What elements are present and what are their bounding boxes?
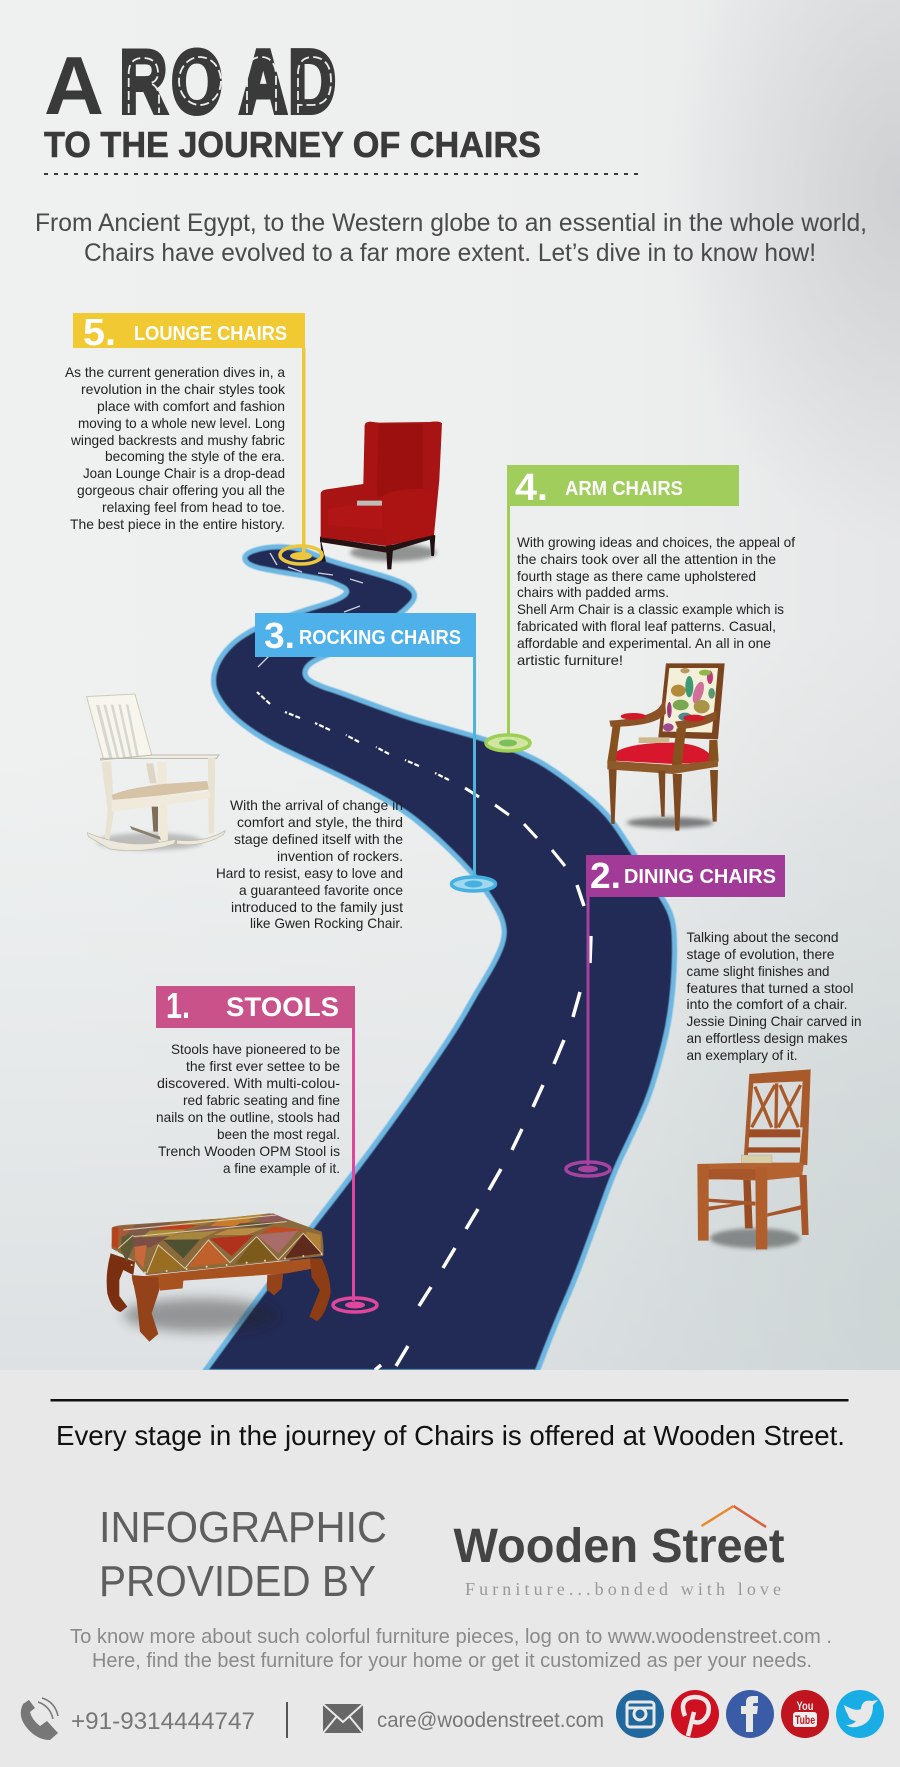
text: Stools have pioneered to be (171, 1041, 340, 1057)
text (156, 1041, 340, 1176)
flag (507, 465, 739, 509)
provided by (99, 1503, 387, 1606)
phone number: +91-9314444747 (71, 1708, 255, 1735)
text (517, 534, 795, 668)
chair: dining (697, 1069, 811, 1249)
text: winged backrests and mushy fabric (70, 432, 285, 448)
text: Jessie Dining Chair carved in (686, 1013, 862, 1029)
text: fourth stage as there came upholstered (517, 568, 756, 584)
text (65, 364, 286, 532)
flag pole and pin (486, 506, 530, 751)
text: introduced to the family just (231, 899, 403, 915)
footer (21, 1399, 884, 1740)
text: the first ever settee to be (186, 1058, 340, 1074)
flag: 5. (83, 312, 116, 354)
title: subtitle: TO THE JOURNEY OF CHAIRS (44, 124, 541, 165)
flag: 1. (166, 985, 190, 1026)
intro text: Chairs have evolved to a far more extent. Let’s dive in to know how! (84, 239, 816, 267)
text: gorgeous chair offering you all the (77, 482, 285, 498)
logo: Wooden Street: Wooden Street (454, 1520, 785, 1573)
text: came slight finishes and (686, 963, 830, 979)
title (44, 34, 641, 174)
text: red fabric seating and fine (183, 1092, 340, 1108)
provided by: PROVIDED BY (99, 1557, 376, 1606)
icon: envelope (323, 1704, 363, 1733)
text: Talking about the second (686, 929, 838, 945)
flag pole and pin (566, 897, 610, 1176)
flag: 4. (515, 467, 548, 509)
flag: STOOLS (226, 992, 339, 1022)
text: a fine example of it. (223, 1160, 340, 1176)
text: Hard to resist, easy to love and (216, 865, 403, 881)
flag: ARM CHAIRS (565, 478, 683, 500)
flag: ROCKING CHAIRS (299, 627, 461, 649)
text: With the arrival of change in (230, 797, 403, 813)
website note: Here, find the best furniture for your home or get it customized as per your needs. (92, 1650, 812, 1672)
text: revolution in the chair styles took (81, 381, 286, 397)
flag: DINING CHAIRS (624, 866, 776, 888)
stage 2: dining chairs (566, 855, 862, 1176)
stage 5: lounge chairs (65, 312, 322, 564)
text: discovered. With multi-colou- (157, 1075, 340, 1091)
intro text: From Ancient Egypt, to the Western globe to an essential in the whole world, (35, 209, 867, 237)
text: a guaranteed favorite once (239, 882, 403, 898)
text: Shell Arm Chair is a classic example which is (517, 601, 784, 617)
text: nails on the outline, stools had (156, 1109, 340, 1125)
text: features that turned a stool (686, 980, 854, 996)
provided by: INFOGRAPHIC (99, 1503, 387, 1552)
text: stage of evolution, there (686, 946, 835, 962)
text: comfort and style, the third (237, 814, 403, 830)
chair: lounge (320, 422, 442, 569)
text: chairs with padded arms. (517, 584, 669, 600)
stage 3: rocking chairs (216, 613, 496, 931)
text: place with comfort and fashion (97, 398, 285, 414)
text: With growing ideas and choices, the appeal of (517, 534, 795, 550)
icon: youtube: Tube (795, 1713, 815, 1727)
icon: youtube (781, 1690, 829, 1738)
text: an exemplary of it. (686, 1047, 798, 1063)
text: fabricated with floral leaf patterns. Casual, (517, 618, 776, 634)
intro text (35, 209, 867, 267)
flag: 2. (590, 855, 621, 896)
flag: 3. (264, 615, 295, 656)
text: into the comfort of a chair. (686, 996, 848, 1012)
logo: Wooden Street (454, 1506, 785, 1599)
text (216, 797, 403, 931)
flag (156, 985, 355, 1028)
icon: phone (21, 1698, 58, 1740)
text (686, 929, 862, 1063)
icon: youtube: You (796, 1699, 814, 1713)
text: Joan Lounge Chair is a drop-dead (83, 465, 285, 481)
closing line: Every stage in the journey of Chairs is offered at Wooden Street. (56, 1420, 845, 1451)
flag pole and pin (333, 1028, 377, 1312)
flag (73, 312, 305, 354)
road (204, 547, 675, 1372)
text: relaxing feel from head to toe. (102, 499, 285, 515)
icon: pinterest (671, 1690, 719, 1738)
flag pole and pin (452, 657, 496, 891)
website note: To know more about such colorful furniture pieces, log on to www.woodenstreet.com . (70, 1626, 832, 1648)
flag: LOUNGE CHAIRS (134, 323, 287, 345)
stage 4: arm chairs (486, 465, 795, 751)
text: moving to a whole new level. Long (78, 415, 285, 431)
flag (586, 855, 785, 897)
title: A ROAD: A (44, 39, 104, 132)
icon: twitter (836, 1690, 884, 1738)
icon: instagram (616, 1690, 664, 1738)
logo: Wooden Street: Furniture...bonded with love (465, 1579, 781, 1599)
text: Trench Wooden OPM Stool is (158, 1143, 340, 1159)
icon: facebook (726, 1690, 774, 1738)
chair: stool (107, 1213, 331, 1342)
text: artistic furniture! (517, 652, 623, 668)
title: A ROAD: ROAD (120, 34, 336, 131)
text: been the most regal. (217, 1126, 340, 1142)
flag pole and pin (280, 348, 322, 564)
text: like Gwen Rocking Chair. (250, 915, 403, 931)
text: stage defined itself with the (234, 831, 403, 847)
chair: arm (607, 663, 725, 831)
chair: rocking (87, 694, 225, 851)
text: the chairs took over all the attention in the (517, 551, 776, 567)
text: The best piece in the entire history. (70, 516, 285, 532)
flag (255, 613, 476, 657)
email: care@woodenstreet.com (377, 1709, 604, 1732)
text: As the current generation dives in, a (65, 364, 285, 380)
text: an effortless design makes (686, 1030, 848, 1046)
website note (70, 1626, 832, 1672)
road centre dashes (257, 553, 591, 1370)
text: invention of rockers. (277, 848, 403, 864)
text: affordable and experimental. An all in one (517, 635, 771, 651)
stage 1: stools (156, 985, 377, 1312)
text: becoming the style of the era. (105, 448, 285, 464)
